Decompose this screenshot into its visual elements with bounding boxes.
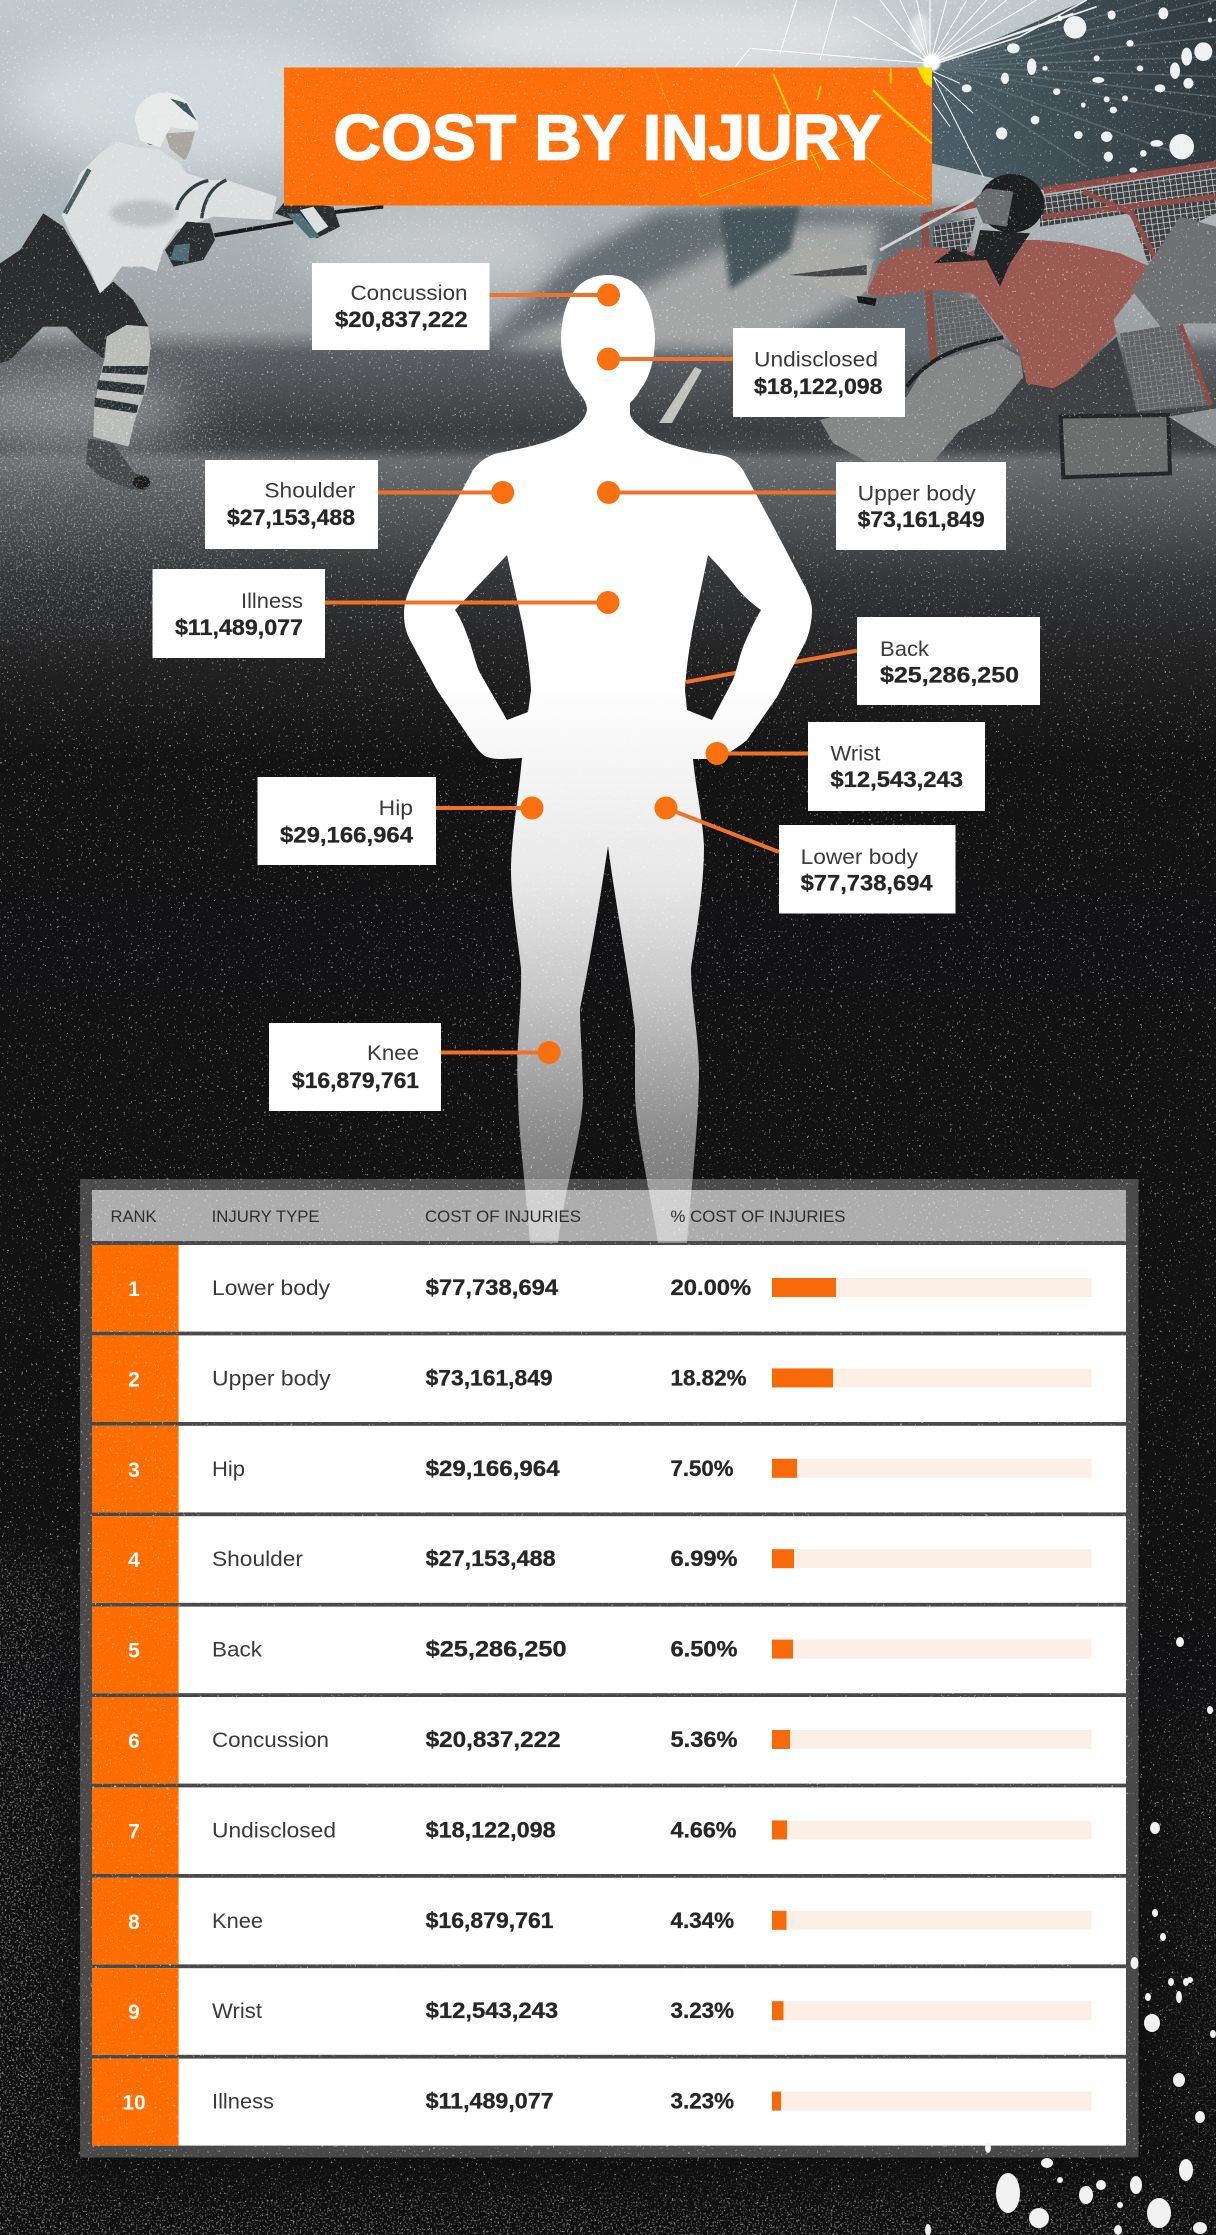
callout: undisclosed (597, 328, 905, 417)
row 6: Concussion (212, 1728, 329, 1752)
goalie stick (880, 197, 977, 250)
skater helmet and face (135, 93, 198, 161)
row 10: 3.23% (670, 2089, 734, 2114)
callout: back: $25,286,250 (880, 662, 1019, 688)
callout: upper body: Upper body (858, 482, 976, 506)
row 6: 5.36% (670, 1727, 738, 1752)
net frame (923, 164, 1216, 405)
title banner: COST BY INJURY (334, 102, 882, 174)
row 8: $16,879,761 (426, 1908, 554, 1933)
row 6 (92, 1697, 1126, 1784)
illustration: goalie and net (785, 164, 1216, 477)
table header: RANK (110, 1207, 157, 1226)
callout: concussion: $20,837,222 (335, 307, 468, 332)
row 10: Illness (212, 2090, 274, 2114)
callout: back: Back (880, 637, 929, 661)
row 4: 6.99% (670, 1546, 738, 1571)
title banner (284, 67, 932, 206)
icon: cracked glass (735, 0, 1097, 177)
row 10 (92, 2059, 1126, 2146)
callout: upper body (597, 462, 1006, 550)
illustration: hockey skater (0, 93, 383, 490)
callout: lower body: Lower body (801, 845, 918, 869)
callout: concussion (312, 263, 620, 350)
row 9: $12,543,243 (426, 1998, 558, 2023)
row 2 (92, 1335, 1126, 1422)
row 8: 8 (128, 1911, 140, 1934)
table header (92, 1190, 1126, 1241)
row 3: 3 (128, 1459, 140, 1482)
callout: shoulder (205, 460, 514, 549)
callout: undisclosed: $18,122,098 (754, 374, 882, 399)
row 5: $25,286,250 (426, 1637, 567, 1662)
row 8: Knee (212, 1909, 263, 1933)
row 1: 20.00% (670, 1275, 751, 1300)
row 10: $11,489,077 (426, 2089, 554, 2114)
net mesh (933, 168, 1216, 412)
background: clouds, mountains and stadium (0, 0, 980, 450)
row 9 (92, 1968, 1126, 2055)
skater skate (86, 438, 150, 490)
callout: knee (269, 1023, 560, 1111)
row 2: 18.82% (670, 1365, 746, 1390)
row 2: $73,161,849 (426, 1365, 553, 1390)
callout: lower body: $77,738,694 (801, 871, 933, 896)
row 4 (92, 1516, 1126, 1603)
callout: knee: Knee (367, 1041, 419, 1065)
row 5: 5 (128, 1640, 140, 1663)
texture: snow over banner and rank cells (92, 68, 932, 2146)
table frame (80, 1179, 1138, 2158)
row 5: 6.50% (670, 1637, 738, 1662)
callout: hip: $29,166,964 (280, 822, 414, 848)
table header: INJURY TYPE (212, 1207, 320, 1226)
row 5: Back (212, 1638, 262, 1662)
row 3: $29,166,964 (426, 1456, 560, 1481)
callout: upper body: $73,161,849 (858, 507, 985, 532)
row 7: 4.66% (670, 1817, 736, 1842)
callout: shoulder: $27,153,488 (227, 505, 355, 530)
callout: undisclosed: Undisclosed (754, 348, 878, 372)
callout: back (857, 617, 1040, 705)
row 4: $27,153,488 (426, 1546, 556, 1571)
goalie trapper (1132, 217, 1216, 330)
row 7 (92, 1787, 1126, 1874)
row 6: $20,837,222 (426, 1727, 561, 1752)
goalie leg pads (820, 337, 1023, 462)
background: stadium and ice chunks (932, 0, 1216, 190)
goalie jersey (867, 240, 1150, 388)
row 8: 4.34% (670, 1908, 734, 1933)
callout: hip: Hip (379, 796, 413, 820)
callout: knee: $16,879,761 (292, 1068, 419, 1093)
row 2: 2 (128, 1368, 140, 1391)
callout: illness: Illness (241, 589, 303, 613)
equipment bag (1061, 408, 1216, 477)
panel: ranking table (80, 1179, 1138, 2158)
row 3: 7.50% (670, 1456, 734, 1481)
row 1: $77,738,694 (426, 1275, 559, 1300)
row 8 (92, 1878, 1126, 1964)
callout: wrist (706, 722, 985, 811)
goalie helmet (973, 174, 1044, 233)
skater gloves (165, 202, 340, 267)
row 7: 7 (128, 1820, 140, 1843)
callout: hip (258, 777, 544, 865)
table header: COST OF INJURIES (425, 1207, 581, 1226)
callout: wrist: $12,543,243 (830, 767, 963, 792)
skater jersey (62, 142, 277, 293)
row 7: $18,122,098 (426, 1817, 556, 1842)
row 9: 3.23% (670, 1998, 734, 2023)
skater leg and striped sock (93, 325, 151, 447)
row 5 (92, 1607, 1126, 1693)
row 4: Shoulder (212, 1547, 303, 1571)
body silhouette (404, 275, 812, 1243)
row 9: Wrist (212, 1999, 262, 2023)
row 1: Lower body (212, 1276, 330, 1300)
callout: wrist: Wrist (830, 741, 880, 765)
callout: concussion: Concussion (350, 281, 468, 305)
texture: snow chunks lower right (925, 1637, 1216, 2235)
row 3 (92, 1426, 1126, 1512)
callout: illness: $11,489,077 (175, 615, 303, 640)
callout: illness (152, 569, 620, 658)
row 7: Undisclosed (212, 1818, 336, 1842)
skater stick (213, 205, 383, 237)
icon: back connector line (686, 651, 857, 682)
goalie blocker (785, 243, 877, 306)
goalie trousers (960, 337, 1137, 430)
callout: lower body (654, 796, 956, 914)
row 10: 10 (122, 2092, 146, 2115)
row 9: 9 (128, 2001, 140, 2024)
skater pants (0, 213, 148, 363)
table header: % COST OF INJURIES (670, 1207, 846, 1226)
row 2: Upper body (212, 1366, 331, 1390)
row 4: 4 (128, 1549, 140, 1572)
row 1: 1 (128, 1278, 140, 1301)
row 6: 6 (128, 1730, 140, 1753)
row 1 (92, 1245, 1126, 1332)
row 3: Hip (212, 1457, 245, 1481)
callout: shoulder: Shoulder (264, 478, 355, 502)
